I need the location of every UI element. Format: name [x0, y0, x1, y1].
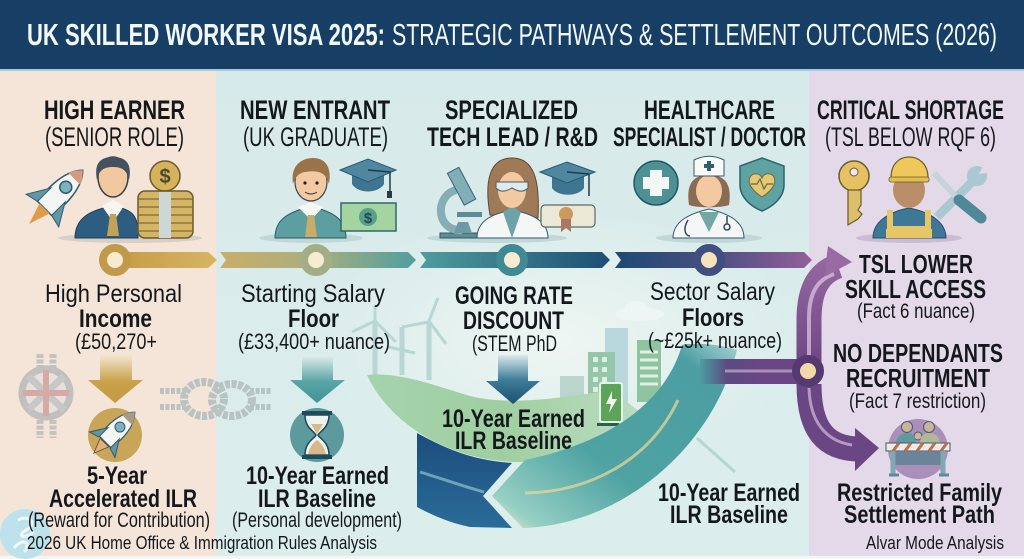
icon: diploma — [541, 205, 595, 232]
icon: hourglass badge — [290, 408, 344, 462]
icon group: graduate, cap, banknote — [259, 158, 396, 243]
decorative pale strut — [697, 438, 735, 472]
EV charger — [597, 383, 622, 426]
icon: heart shield — [740, 158, 784, 211]
column 2: salary text — [238, 280, 390, 354]
wind turbines — [352, 298, 446, 380]
icon: graduate — [275, 158, 346, 238]
icon: rocket badge — [81, 399, 148, 466]
node: tech lead — [500, 248, 524, 272]
column 1: salary text — [45, 280, 182, 354]
icon: key — [839, 161, 869, 225]
column 1: outcome text: 5-Year — [87, 462, 147, 490]
icon: coins: $ — [159, 166, 171, 188]
city with EV charger — [560, 301, 664, 421]
icon: coins — [138, 161, 193, 238]
column 1: salary text: Income — [79, 305, 152, 333]
column 3: salary text: (STEM PhD — [472, 331, 557, 356]
column 3: salary text: GOING RATE — [455, 282, 573, 310]
source footer right: Alvar Mode Analysis — [866, 533, 1004, 553]
column 4: outcome text: 10-Year Earned — [658, 479, 800, 507]
source footer left: 2026 UK Home Office & Immigration Rules Analysis — [27, 533, 377, 553]
column 4: healthcare heading: SPECIALIST / DOCTOR — [613, 122, 806, 152]
icon: mortarboard 2 — [540, 162, 595, 196]
icon group: key, worker, tools — [839, 157, 994, 243]
icon: worker — [873, 157, 946, 238]
purple branch to right column — [700, 246, 879, 471]
column 5: TSL access text: (Fact 6 nuance) — [857, 300, 975, 323]
timeline segment: gold — [115, 252, 217, 268]
column 2: outcome text: (Personal development) — [232, 509, 402, 532]
icon: executive — [75, 157, 138, 238]
icon: scientist — [477, 158, 548, 238]
column 3: outcome text — [442, 405, 585, 455]
teal return arrow — [492, 344, 737, 528]
node: high earner — [103, 248, 127, 272]
green hill swoosh — [367, 375, 640, 462]
column 1: high earner heading: HIGH EARNER — [44, 95, 185, 125]
column 5: critical shortage heading — [817, 95, 1004, 152]
column 1: outcome text — [28, 462, 210, 532]
column 3: outcome text: ILR Baseline — [455, 427, 572, 455]
column 1: salary text: High Personal — [45, 280, 182, 308]
title banner: UK SKILLED WORKER VISA 2025: — [27, 17, 385, 52]
icon group: rocket, executive, coins — [13, 154, 202, 243]
column 4: salary text: Floors — [682, 304, 744, 332]
timeline segment: teal to navy — [420, 252, 610, 268]
column 3: tech lead heading: SPECIALIZED — [445, 95, 578, 125]
column 3: outcome text: 10-Year Earned — [442, 405, 585, 433]
title banner — [0, 0, 1024, 69]
logo badge — [0, 509, 50, 559]
node: new entrant — [304, 248, 328, 272]
timeline segment: gold to teal — [220, 252, 416, 268]
decorative rope knot — [160, 382, 272, 416]
column 1: outcome text: Accelerated ILR — [49, 485, 197, 513]
column 5: TSL access text: TSL LOWER — [859, 249, 973, 279]
timeline segment: navy to purple — [615, 252, 812, 268]
arrow: gold down — [88, 355, 143, 403]
column 2: outcome text — [232, 462, 402, 532]
column 2: new entrant heading: (UK GRADUATE) — [243, 122, 388, 152]
icon: banknote: $ — [364, 210, 373, 227]
column 5: TSL access text — [845, 249, 986, 323]
column 3: salary text: DISCOUNT — [463, 307, 564, 335]
column 1: outcome text: (Reward for Contribution) — [28, 509, 210, 532]
arrow: navy down — [486, 355, 540, 404]
icon: rocket — [13, 154, 99, 240]
column 2: salary text: Floor — [288, 305, 339, 333]
column 2: salary text: Starting Salary — [241, 280, 385, 308]
arrow: teal down — [290, 355, 345, 403]
column 5: restricted settlement text — [837, 479, 1002, 529]
column 4: salary text: Sector Salary — [650, 278, 775, 306]
icon group: plus, nurse, shield — [634, 156, 784, 243]
column 2: outcome text: 10-Year Earned — [246, 462, 389, 490]
icon: microscope — [440, 167, 483, 238]
column 4: healthcare heading — [613, 95, 806, 152]
icon: family behind barrier — [886, 419, 950, 479]
column 2: new entrant heading — [240, 95, 390, 152]
icon: medical plus — [634, 161, 678, 205]
navy return arrow — [417, 433, 512, 528]
column 4: outcome text — [658, 479, 800, 529]
column 4: salary text — [648, 278, 782, 353]
column 1: high earner heading — [44, 95, 185, 152]
column 3: tech lead heading: TECH LEAD / R&D — [427, 122, 598, 152]
column 1: salary text: (£50,270+ — [75, 329, 157, 354]
column 3: salary text — [455, 282, 573, 356]
column 2: outcome text: ILR Baseline — [258, 485, 376, 513]
column 4: salary text: (~£25k+ nuance) — [648, 328, 782, 353]
column 5: no dependants text: (Fact 7 restriction) — [849, 390, 986, 413]
timeline — [103, 248, 812, 272]
column 5: no dependants text — [833, 338, 1003, 413]
node: healthcare — [697, 248, 721, 272]
icon: nurse — [673, 156, 744, 238]
column 4: healthcare heading: HEALTHCARE — [644, 95, 775, 125]
column 1: high earner heading: (SENIOR ROLE) — [45, 122, 184, 152]
decorative rope with union flag — [22, 354, 70, 438]
icon: wrench and screwdriver — [934, 160, 994, 218]
icon: mortarboard — [340, 159, 396, 198]
column 4: outcome text: ILR Baseline — [670, 501, 788, 529]
icon group: microscope, scientist, cap, diploma — [427, 158, 595, 243]
column 2: new entrant heading: NEW ENTRANT — [240, 95, 390, 125]
column 3: tech lead heading — [427, 95, 598, 152]
column 2: salary text: (£33,400+ nuance) — [238, 329, 390, 354]
